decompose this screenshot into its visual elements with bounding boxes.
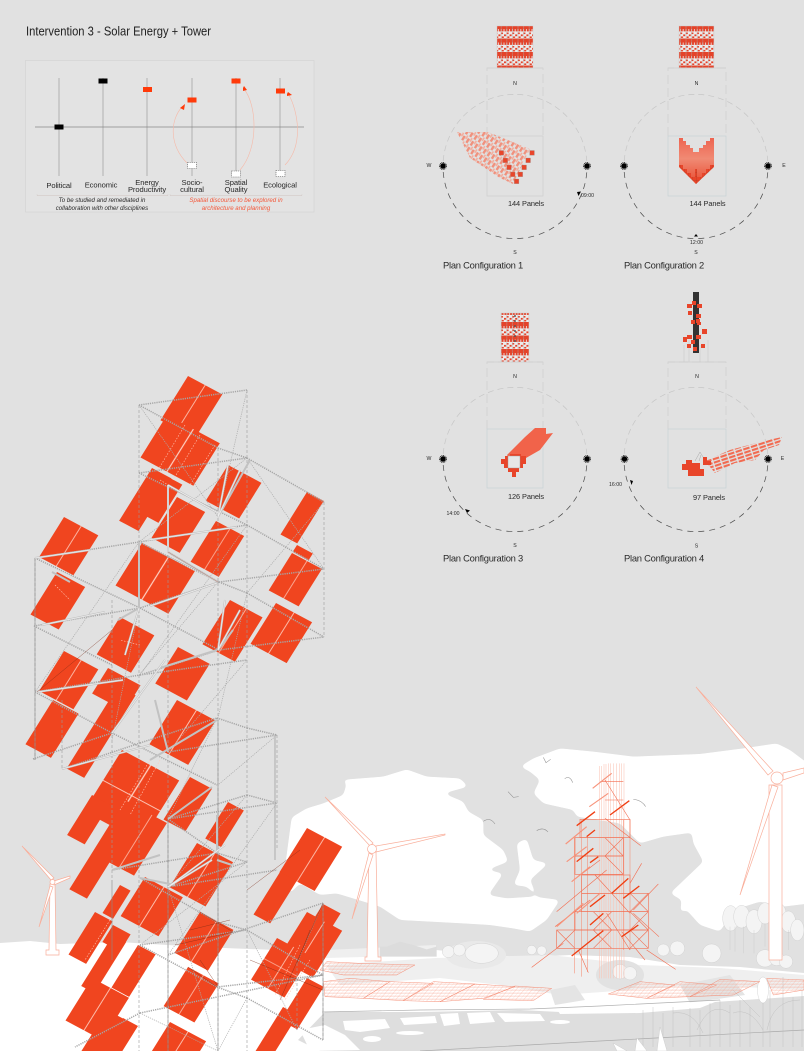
plan frame: [668, 362, 726, 488]
panel: plan configuration 2: [621, 26, 786, 270]
caption: Plan Configuration 3: [443, 552, 523, 564]
note: spatial discourse: Spatial discourse to be explored in: [189, 197, 283, 204]
compass: [427, 374, 517, 549]
foreground solar tower: panels: [25, 376, 342, 1051]
marker: energy productivity: [143, 87, 152, 92]
compass: N: [695, 81, 699, 87]
dark structural lines: [37, 552, 323, 1000]
sun path: [443, 387, 587, 532]
sun path: [624, 387, 768, 532]
landscape illustration: [0, 687, 804, 1051]
marker: socio-cultural: [188, 98, 196, 102]
elevation 2: [679, 26, 714, 68]
time marker: [609, 480, 633, 488]
panel plan: [501, 454, 526, 477]
improvement arrows: [173, 86, 298, 170]
compass: N: [695, 374, 699, 380]
distant orange tower: [532, 763, 676, 978]
axis labels: Economic: [85, 180, 118, 190]
cloud formations: [283, 743, 804, 932]
plan frame: [668, 68, 726, 196]
note: other disciplines: collaboration with other disciplines: [56, 205, 148, 212]
tree clusters: [380, 903, 804, 980]
panel plan: [679, 165, 714, 184]
compass: W: [427, 163, 432, 169]
time marker: 16:00: [609, 482, 622, 488]
axes: [35, 78, 304, 176]
time marker: [577, 192, 594, 199]
panel plan: [682, 452, 711, 476]
time marker: [690, 234, 703, 246]
compass: [427, 81, 517, 256]
solid columns: [35, 558, 323, 1051]
compass: E: [782, 163, 786, 169]
member highlights: [35, 465, 240, 887]
wind turbine: centre: [325, 797, 445, 961]
elevation 3: [501, 313, 529, 362]
axis labels: Energy: [135, 178, 159, 187]
sun path: [443, 94, 587, 239]
note: other disciplines: To be studied and remediated in: [59, 197, 146, 204]
compass: N: [513, 81, 517, 87]
suns: [440, 456, 590, 462]
axis labels: Quality: [225, 185, 248, 194]
solar panels: [25, 376, 342, 1051]
title: Intervention 3 - Solar Energy + Tower: [26, 24, 212, 38]
compass: [695, 374, 785, 550]
columns: [35, 390, 324, 1051]
caption: Plan Configuration 4: [624, 552, 704, 564]
marker: economic: [98, 78, 108, 84]
marker: political: [54, 124, 64, 130]
elevation 1: [497, 26, 533, 68]
caption: Plan Configuration 2: [624, 260, 704, 270]
ground plane: [0, 941, 804, 1051]
suns: [440, 163, 590, 169]
plan frame: [487, 362, 543, 488]
compass: N: [513, 374, 517, 380]
sun path: [624, 94, 768, 239]
marker: ecological: [276, 88, 285, 94]
note: spatial discourse: [189, 197, 283, 212]
compass: S: [695, 544, 699, 550]
diagonal braces: [35, 390, 324, 1051]
plan frame: [487, 68, 543, 196]
wind turbine: right: [696, 687, 804, 960]
solar panel field: [320, 962, 804, 1002]
note: spatial discourse: architecture and planning: [202, 205, 271, 212]
time marker: [446, 509, 470, 517]
axis labels: Productivity: [128, 185, 166, 194]
panel: plan configuration 1: [427, 26, 594, 270]
panel count: 144 Panels: [690, 199, 726, 208]
dotted chord members: [33, 390, 324, 1047]
compass: S: [694, 250, 698, 256]
panel plan: [499, 150, 534, 184]
axis labels: Spatial: [225, 178, 248, 187]
panel shadow: [507, 428, 553, 468]
panel dashes: [55, 425, 310, 1000]
caption: Plan Configuration 1: [443, 260, 523, 270]
marker: spatial quality: [232, 78, 240, 84]
suns: [621, 163, 771, 169]
chart frame: [26, 60, 314, 212]
axis labels: Socio-: [182, 178, 203, 187]
elevation 4 tower: [683, 292, 708, 362]
time marker: 09:00: [581, 193, 594, 199]
panel: plan configuration 4: [609, 292, 785, 564]
group brackets: [37, 194, 302, 196]
compass: [694, 81, 786, 256]
compass: E: [781, 456, 785, 462]
foreground solar tower: truss frame: [33, 390, 324, 1051]
axis labels: Political: [46, 181, 72, 190]
panel shadow: [705, 437, 782, 473]
panel count: 126 Panels: [508, 492, 544, 501]
panel count: 97 Panels: [693, 493, 725, 502]
panel: six-axis evaluation chart: [26, 60, 314, 212]
axis labels: cultural: [180, 185, 204, 194]
axis labels: Ecological: [263, 180, 297, 190]
note: other disciplines: [56, 197, 148, 212]
birds: [483, 757, 646, 832]
axis labels: [46, 178, 297, 194]
time marker: 14:00: [446, 511, 460, 517]
panel shadow: [679, 138, 714, 184]
compass: S: [513, 250, 517, 256]
heavy bright members: [35, 460, 250, 887]
panel shadow: [457, 132, 530, 184]
wind turbine: left: [22, 846, 70, 955]
foreground terrain: [298, 977, 804, 1051]
panel: plan configuration 3: [427, 313, 590, 564]
suns: [621, 456, 771, 462]
dashed baseline markers: [188, 162, 285, 177]
compass: S: [513, 543, 517, 549]
compass: W: [427, 456, 432, 462]
stippled ground texture: [326, 941, 804, 1005]
panel count: 144 Panels: [508, 199, 544, 208]
time marker: 12:00: [690, 240, 703, 246]
